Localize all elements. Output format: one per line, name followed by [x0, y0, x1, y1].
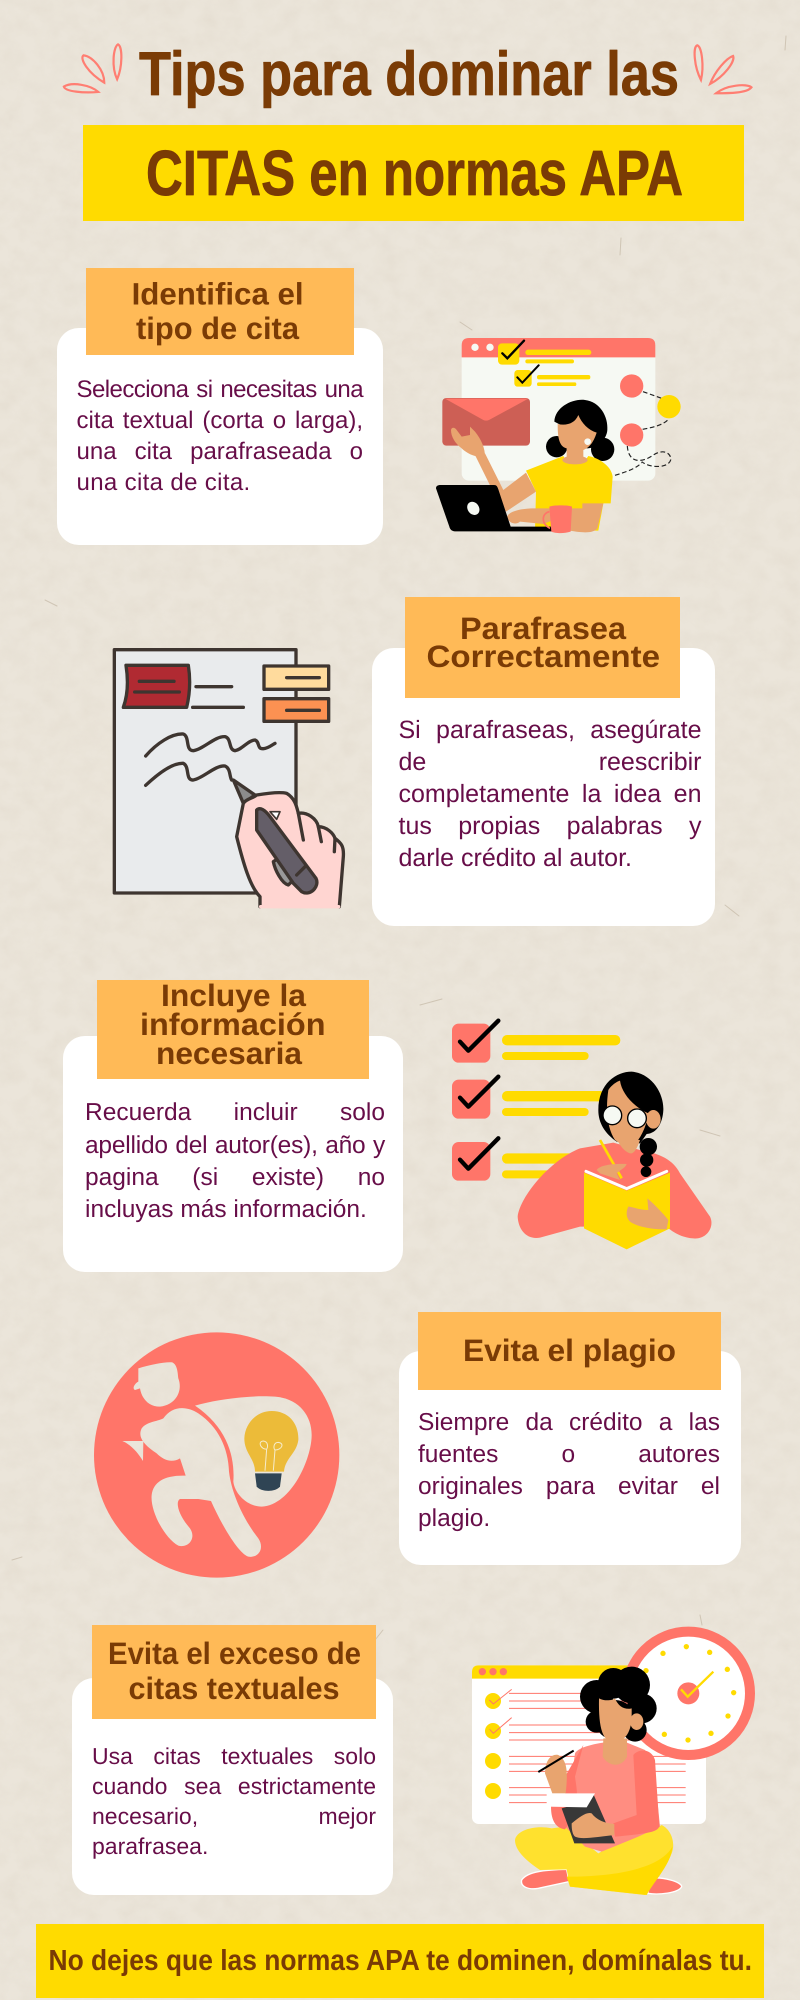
body text: Selecciona si necesitas una: [76, 376, 363, 403]
card background: [57, 328, 383, 545]
icon: left leaves: [64, 44, 121, 92]
heading text: [140, 978, 326, 1071]
body text: Recuerda incluir solo: [85, 1099, 385, 1126]
body text: [76, 376, 364, 496]
closing banner: [36, 1924, 764, 1998]
title decoration and heading: [62, 40, 753, 221]
heading tab: [92, 1625, 376, 1719]
panel: incluye la informacion necesaria: [63, 980, 403, 1272]
panel: evita el plagio: [399, 1312, 741, 1565]
heading text: Evita el plagio: [463, 1333, 676, 1368]
card background: [63, 1036, 403, 1272]
body text: cuando sea estrictamente: [92, 1773, 376, 1799]
body text: necesario, mejor: [92, 1803, 376, 1829]
heading text: Evita el exceso de: [108, 1636, 361, 1671]
body text: cita textual (corta o larga),: [76, 407, 363, 434]
heading line one: Tips para dominar las: [139, 40, 679, 109]
illustration: woman with laptop and email: [436, 338, 681, 534]
body text: [85, 1099, 386, 1223]
body text: plagio.: [418, 1505, 490, 1532]
heading text: Parafrasea: [460, 611, 627, 646]
body text: parafrasea.: [92, 1833, 208, 1859]
body text: una cita parafraseada o: [76, 438, 363, 465]
heading text: tipo de cita: [136, 311, 300, 346]
heading text: necesaria: [156, 1036, 303, 1071]
heading text: citas textuales: [128, 1671, 340, 1706]
body text: incluyas más información.: [85, 1196, 367, 1223]
body text: Si parafraseas, asegúrate: [398, 716, 702, 744]
panel: parafrasea correctamente: [372, 597, 715, 926]
card background: [399, 1351, 741, 1565]
body text: completamente la idea en: [398, 780, 702, 808]
heading text: [108, 1636, 361, 1706]
body text: tus propias palabras y: [398, 812, 702, 840]
body text: darle crédito al autor.: [398, 844, 632, 872]
heading tab: [418, 1312, 721, 1390]
body text: [398, 716, 702, 872]
body text: fuentes o autores: [418, 1441, 720, 1468]
heading tab: [97, 980, 369, 1079]
body text: originales para evitar el: [418, 1473, 720, 1500]
illustration: student with checklist and notebook: [452, 1018, 712, 1250]
heading tab: [405, 597, 680, 698]
body text: [418, 1409, 720, 1532]
heading tab: [86, 268, 354, 355]
body text: Siempre da crédito a las: [418, 1409, 720, 1436]
heading text: [132, 277, 304, 346]
title banner: [83, 125, 744, 221]
heading text: Correctamente: [426, 639, 660, 674]
illustration: person carrying idea bulb: [94, 1332, 340, 1578]
icon: right leaves: [695, 45, 751, 93]
body text: de reescribir: [398, 748, 702, 776]
card background: [372, 648, 715, 926]
illustration: woman sitting with clock and checklist: [472, 1626, 755, 1895]
body text: Usa citas textuales solo: [92, 1743, 376, 1769]
body text: [92, 1743, 376, 1859]
body text: pagina (si existe) no: [85, 1164, 385, 1191]
panel: identifica el tipo de cita: [57, 268, 383, 545]
heading text: Identifica el: [132, 277, 304, 312]
body text: una cita de cita.: [76, 469, 251, 496]
card background: [72, 1678, 393, 1895]
panel: evita el exceso de citas textuales: [72, 1625, 393, 1895]
body text: apellido del autor(es), año y: [85, 1132, 385, 1159]
heading text: información: [140, 1007, 326, 1042]
heading text: [426, 611, 660, 674]
illustration: hand writing on document: [112, 648, 346, 908]
